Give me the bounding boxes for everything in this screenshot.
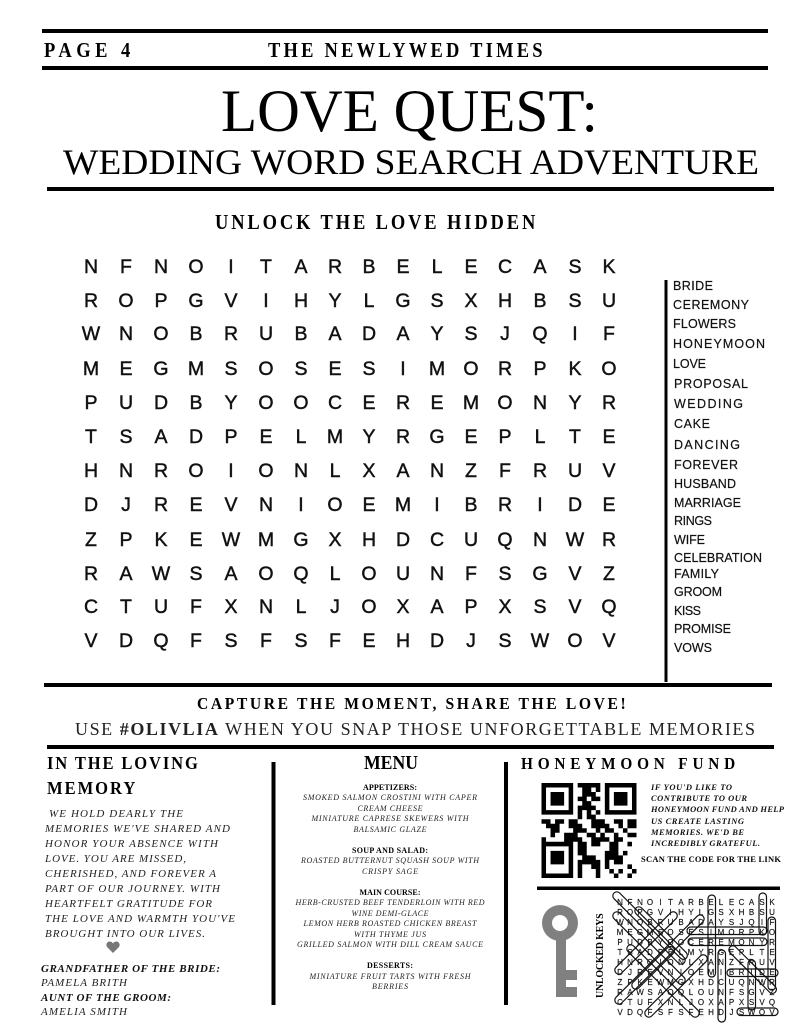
desserts: DESSERTS:	[367, 961, 413, 970]
memorial message: LOVE. YOU ARE MISSED,	[44, 853, 186, 865]
memory heading: IN THE LOVING	[47, 753, 198, 773]
word list: WIFE	[674, 533, 705, 547]
memorial message: PART OF OUR JOURNEY. WITH	[44, 883, 221, 895]
icon: heart	[106, 942, 120, 953]
desserts	[308, 961, 472, 991]
memorial message: THE LOVE AND WARMTH YOU'VE	[45, 913, 235, 925]
icon: key	[542, 905, 578, 997]
contribution note: CONTRIBUTE TO OUR	[651, 793, 747, 803]
word list: FOREVER	[674, 458, 738, 472]
masthead	[42, 29, 768, 70]
word list: CEREMONY	[673, 298, 750, 312]
answer ovals	[611, 890, 778, 1022]
contribution note: IF YOU'D LIKE TO	[650, 782, 732, 792]
memorial message: WE HOLD DEARLY THE	[49, 808, 183, 820]
appetizers: MINIATURE CAPRESE SKEWERS WITH	[310, 814, 470, 823]
honoured names: AUNT OF THE GROOM:	[40, 992, 171, 1004]
unlocked keys label: UNLOCKED KEYS	[595, 913, 606, 998]
menu heading: MENU	[364, 752, 418, 774]
main course: WITH THYME JUS	[354, 930, 426, 939]
memorial message: CHERISHED, AND FOREVER A	[45, 868, 216, 880]
solved word search	[611, 890, 778, 1022]
word search heading: UNLOCK THE LOVE HIDDEN	[215, 211, 536, 234]
title: LOVE QUEST:	[221, 78, 598, 144]
honeymoon heading: HONEYMOON FUND	[521, 755, 735, 773]
word search grid: DJREVNIOEMIBRIDE	[84, 494, 616, 516]
hashtag line: USE #OLIVLIA WHEN YOU SNAP THOSE UNFORGETTABLE MEMORIES	[75, 719, 755, 739]
word search grid: NFNOITARBELECASK	[84, 256, 616, 278]
honoured names: GRANDFATHER OF THE BRIDE:	[41, 963, 220, 975]
word list: CAKE	[674, 417, 710, 431]
main course: WINE DEMI-GLACE	[352, 909, 429, 918]
solved word search: WNOBRUBADAYSJQIF	[616, 918, 775, 927]
desserts: MINIATURE FRUIT TARTS WITH FRESH	[308, 972, 472, 981]
word search grid: CTUFXNLJOXAPXSVQ	[84, 596, 617, 618]
word search grid: HNROIONLXANZFRUV	[84, 460, 616, 482]
appetizers: CREAM CHEESE	[358, 804, 423, 813]
solved word search: HNROIONLXANZFRUV	[617, 958, 775, 967]
honoured names: AMELIA SMITH	[40, 1006, 128, 1018]
word list: BRIDE	[673, 279, 713, 293]
appetizers	[303, 783, 477, 834]
word list: RINGS	[674, 514, 712, 528]
word search grid: VDQFSFSFEHDJSWOV	[84, 630, 616, 652]
newspaper name: THE NEWLYWED TIMES	[268, 39, 543, 62]
memorial message: HONOR YOUR ABSENCE WITH	[44, 838, 219, 850]
solved word search: PUDBYOOCEREMONYR	[617, 938, 775, 947]
title	[63, 78, 759, 182]
word list: PROMISE	[674, 622, 731, 636]
solved word search: DJREVNIOEMIBRIDE	[617, 968, 775, 977]
contribution note: US CREATE LASTING	[651, 816, 745, 826]
soup and salad: CRISPY SAGE	[362, 867, 418, 876]
word search grid: TSADPELMYRGEPLTE	[85, 426, 616, 448]
honoured names	[40, 963, 220, 1018]
contribution note	[650, 782, 785, 848]
word list: GROOM	[674, 585, 722, 599]
word list: LOVE	[673, 357, 706, 371]
word search grid: MEGMSOSESIMORPKO	[83, 358, 617, 380]
soup and salad	[300, 846, 480, 876]
solved word search: ZPKEWMGXHDCUQNWR	[618, 978, 775, 987]
word list: KISS	[674, 604, 701, 618]
panel: honeymoon fund	[521, 755, 785, 876]
memorial message: MEMORIES WE'VE SHARED AND	[44, 823, 230, 835]
word list: HUSBAND	[674, 477, 736, 491]
main course	[294, 888, 485, 949]
honoured names: PAMELA BRITH	[40, 977, 128, 989]
word list: DANCING	[674, 438, 740, 452]
solved word search: RAWSAOQLOUNFSGVZ	[617, 988, 775, 997]
word list: MARRIAGE	[674, 496, 741, 510]
subtitle: WEDDING WORD SEARCH ADVENTURE	[63, 142, 759, 182]
word list: FLOWERS	[673, 317, 736, 331]
memorial message: BROUGHT INTO OUR LIVES.	[45, 928, 205, 940]
word list: HONEYMOON	[673, 337, 765, 351]
word search grid: ZPKEWMGXHDCUQNWR	[85, 529, 616, 551]
desserts: BERRIES	[372, 982, 408, 991]
main course: MAIN COURSE:	[360, 888, 420, 897]
solved word search: VDQFSFSFEHDJSWOV	[617, 1008, 775, 1017]
word search grid: WNOBRUBADAYSJQIF	[82, 323, 615, 345]
word list: PROPOSAL	[674, 377, 748, 391]
share banner	[75, 693, 755, 739]
icon: QR code	[542, 783, 636, 878]
scan instruction: SCAN THE CODE FOR THE LINK	[641, 854, 781, 864]
solved word search: ROPGVIHYLGSXHBSU	[617, 908, 775, 917]
contribution note: HONEYMOON FUND AND HELP	[650, 804, 785, 814]
main course: HERB-CRUSTED BEEF TENDERLOIN WITH RED	[294, 898, 485, 907]
memory heading: MEMORY	[47, 778, 136, 798]
word list	[673, 279, 765, 655]
appetizers: BALSAMIC GLAZE	[354, 825, 427, 834]
main course: LEMON HERB ROASTED CHICKEN BREAST	[302, 919, 477, 928]
solved word search: CTUFXNLJOXAPXSVQ	[617, 998, 775, 1007]
appetizers: APPETIZERS:	[363, 783, 417, 792]
contribution note: MEMORIES. WE'D BE	[650, 827, 744, 837]
page number: PAGE 4	[44, 39, 130, 62]
word search grid: RAWSAOQLOUNFSGVZ	[84, 563, 615, 585]
solved word search: TSADPELMYRGEPLTE	[618, 948, 775, 957]
word list: FAMILY	[674, 567, 720, 581]
word search grid: PUDBYOOCEREMONYR	[84, 392, 616, 414]
word list: WEDDING	[674, 397, 743, 411]
word list: CELEBRATION	[674, 551, 762, 565]
memorial message	[44, 808, 235, 940]
solved word search: MEGMSOSESIMORPKO	[617, 928, 775, 937]
soup and salad: ROASTED BUTTERNUT SQUASH SOUP WITH	[300, 856, 480, 865]
share banner: CAPTURE THE MOMENT, SHARE THE LOVE!	[197, 693, 626, 713]
main course: GRILLED SALMON WITH DILL CREAM SAUCE	[297, 940, 483, 949]
solved word search: NFNOITARBELECASK	[617, 898, 775, 907]
memorial message: HEARTFELT GRATITUDE FOR	[44, 898, 212, 910]
word search grid	[82, 256, 617, 652]
panel: menu	[294, 752, 485, 991]
appetizers: SMOKED SALMON CROSTINI WITH CAPER	[303, 793, 477, 802]
soup and salad: SOUP AND SALAD:	[352, 846, 428, 855]
memory heading	[47, 753, 198, 798]
panel: in loving memory	[40, 753, 235, 1018]
word list: VOWS	[674, 641, 712, 655]
word search grid: ROPGVIHYLGSXHBSU	[84, 290, 616, 312]
contribution note: INCREDIBLY GRATEFUL.	[650, 838, 760, 848]
